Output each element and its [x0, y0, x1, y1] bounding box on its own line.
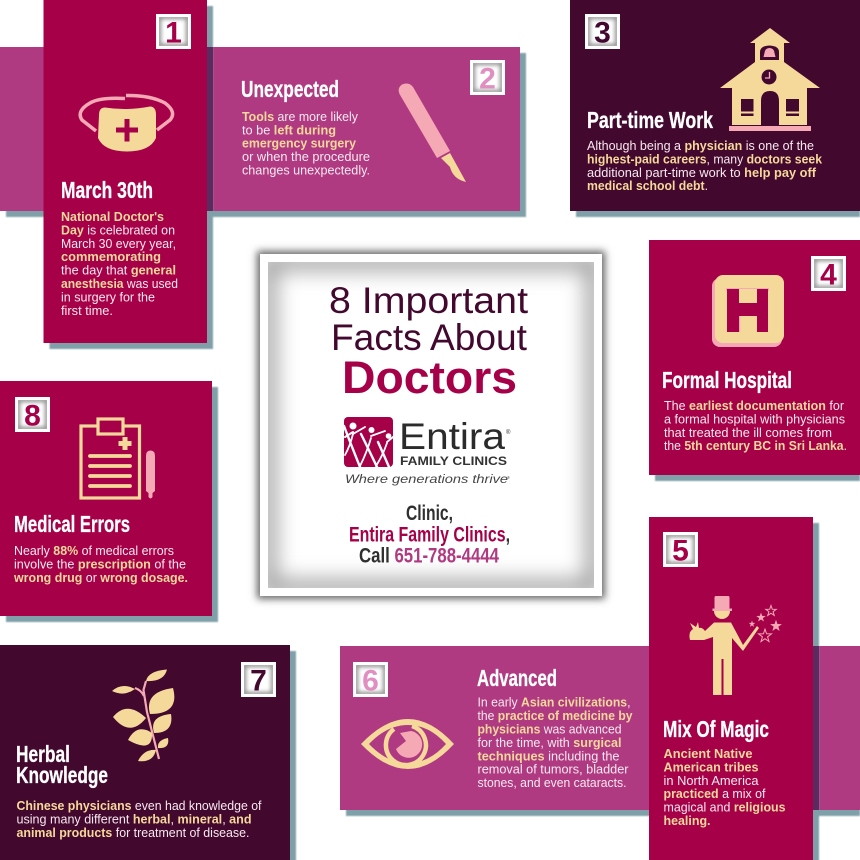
text: mix of magic: practiced a mix of — [664, 787, 766, 801]
text: unexpected — [242, 110, 370, 178]
text: mix of magic: Ancient Native — [664, 747, 752, 761]
badge 2 — [470, 60, 505, 96]
call to action — [349, 502, 510, 568]
text: advanced — [478, 696, 632, 790]
heading: medical errors: Medical Errors — [14, 511, 130, 537]
text: medical errors — [13, 544, 188, 585]
badge 3 — [585, 14, 620, 50]
text: herbal knowledge: animal products for treatment of disease. — [16, 826, 250, 840]
title — [329, 280, 529, 403]
text: march 30th: commemorating — [61, 250, 161, 264]
badge 4: 4 — [820, 259, 837, 292]
text: part-time work — [587, 139, 823, 193]
icon: magician — [689, 596, 782, 695]
text: part-time work: additional part-time work to help pay off — [587, 166, 817, 180]
badge 6 — [353, 662, 388, 698]
panel 7: herbal knowledge — [0, 645, 296, 860]
heading: herbal knowledge — [16, 741, 108, 788]
text: advanced: the practice of medicine by — [478, 709, 632, 723]
text: march 30th: Day is celebrated on — [61, 223, 175, 237]
text: part-time work: highest-paid careers, many doctors seek — [587, 152, 823, 166]
badge 2: 2 — [479, 63, 496, 96]
panel 4: formal hospital — [649, 240, 860, 481]
icon: herb branch — [112, 670, 174, 761]
text: part-time work: Although being a physician is one of the — [587, 139, 814, 153]
call to action: Clinic, — [406, 502, 453, 525]
text: mix of magic — [664, 747, 786, 828]
text: herbal knowledge: using many different herbal, mineral, and — [16, 812, 252, 826]
badge 8: 8 — [24, 400, 41, 433]
badge 3: 3 — [594, 17, 611, 50]
text: formal hospital — [664, 399, 847, 453]
badge 7: 7 — [250, 665, 267, 698]
text: advanced: techniques including the — [478, 749, 620, 763]
text: march 30th — [61, 210, 178, 318]
panel: center title card — [257, 251, 605, 599]
badge 1: 1 — [165, 17, 182, 50]
text: herbal knowledge — [16, 799, 262, 840]
title: Doctors — [342, 352, 517, 403]
text: advanced: In early Asian civilizations, — [478, 696, 630, 710]
text: formal hospital: a formal hospital with physicians — [664, 412, 845, 426]
badge 7 — [241, 662, 276, 698]
text: advanced: for the time, with surgical — [478, 736, 622, 750]
logo: Entira Family Clinics: FAMILY CLINICS — [400, 456, 507, 468]
text: march 30th: National Doctor's — [61, 210, 164, 224]
text: march 30th: March 30 every year, — [61, 237, 176, 251]
badge 4 — [811, 256, 846, 292]
text: march 30th: in surgery for the — [61, 290, 155, 304]
icon: clipboard and pen — [81, 419, 155, 498]
text: unexpected: or when the procedure — [242, 150, 370, 164]
panel 8: medical errors — [0, 381, 218, 622]
text: advanced: removal of tumors, bladder — [478, 763, 628, 777]
text: mix of magic: healing. — [664, 814, 710, 828]
icon: schoolhouse — [720, 28, 820, 131]
text: unexpected: Tools are more likely — [242, 110, 359, 124]
icon: hospital H — [712, 275, 784, 347]
heading: part-time work: Part-time Work — [587, 107, 713, 133]
heading: formal hospital: Formal Hospital — [662, 367, 792, 393]
text: unexpected: changes unexpectedly. — [242, 164, 370, 178]
logo: Entira Family Clinics: Entira — [399, 416, 505, 457]
text: mix of magic: in North America — [664, 774, 758, 788]
heading: mix of magic: Mix Of Magic — [663, 716, 769, 742]
heading: advanced: Advanced — [477, 665, 557, 691]
icon: scalpel — [399, 83, 466, 182]
text: advanced: stones, and even cataracts. — [478, 776, 626, 790]
call to action: Entira Family Clinics, — [349, 524, 510, 546]
title: Facts About — [331, 317, 528, 358]
text: advanced: physicians was advanced — [478, 722, 622, 736]
text: march 30th: anesthesia was used — [61, 277, 178, 291]
text: medical errors: involve the prescription of the — [14, 557, 186, 571]
text: herbal knowledge: Chinese physicians even had knowledge of — [16, 799, 262, 813]
text: formal hospital: that treated the ill comes from — [664, 426, 832, 440]
text: march 30th: the day that general — [61, 264, 176, 278]
text: mix of magic: magical and religious — [664, 801, 786, 815]
badge 6: 6 — [362, 665, 379, 698]
text: medical errors: Nearly 88% of medical errors — [14, 544, 174, 558]
text: part-time work: medical school debt. — [587, 179, 708, 193]
badge 5: 5 — [672, 535, 689, 568]
panel 6: advanced — [340, 646, 860, 816]
heading: unexpected: Unexpected — [241, 76, 339, 102]
heading: herbal knowledge: Knowledge — [16, 762, 108, 788]
icon: eye — [361, 719, 454, 769]
text: mix of magic: American tribes — [664, 760, 758, 774]
text: formal hospital: the 5th century BC in Sri Lanka. — [664, 439, 847, 453]
title: 8 Important — [329, 280, 529, 321]
text: march 30th: first time. — [61, 304, 113, 318]
logo: Entira Family Clinics: Where generations thrive — [345, 474, 508, 486]
text: unexpected: emergency surgery — [242, 137, 356, 151]
call to action: Call 651-788-4444 — [359, 544, 499, 568]
text: medical errors: wrong drug or wrong dosage. — [13, 571, 188, 585]
panel 1: march 30th — [44, 0, 213, 349]
icon: surgical mask — [80, 95, 173, 152]
badge 5 — [663, 532, 698, 568]
logo: Entira Family Clinics: ® — [507, 475, 510, 480]
text: unexpected: to be left during — [242, 123, 336, 137]
panel 3: part-time work — [570, 0, 860, 217]
logo: Entira Family Clinics — [344, 416, 511, 486]
logo: Entira Family Clinics: ® — [506, 429, 511, 436]
badge 1 — [156, 14, 191, 50]
heading: march 30th: March 30th — [61, 177, 153, 203]
panel 5: mix of magic — [649, 517, 819, 860]
text: formal hospital: The earliest documentation for — [664, 399, 844, 413]
panel 2: unexpected — [0, 47, 526, 217]
heading: herbal knowledge: Herbal — [16, 741, 70, 767]
badge 8 — [15, 397, 50, 433]
